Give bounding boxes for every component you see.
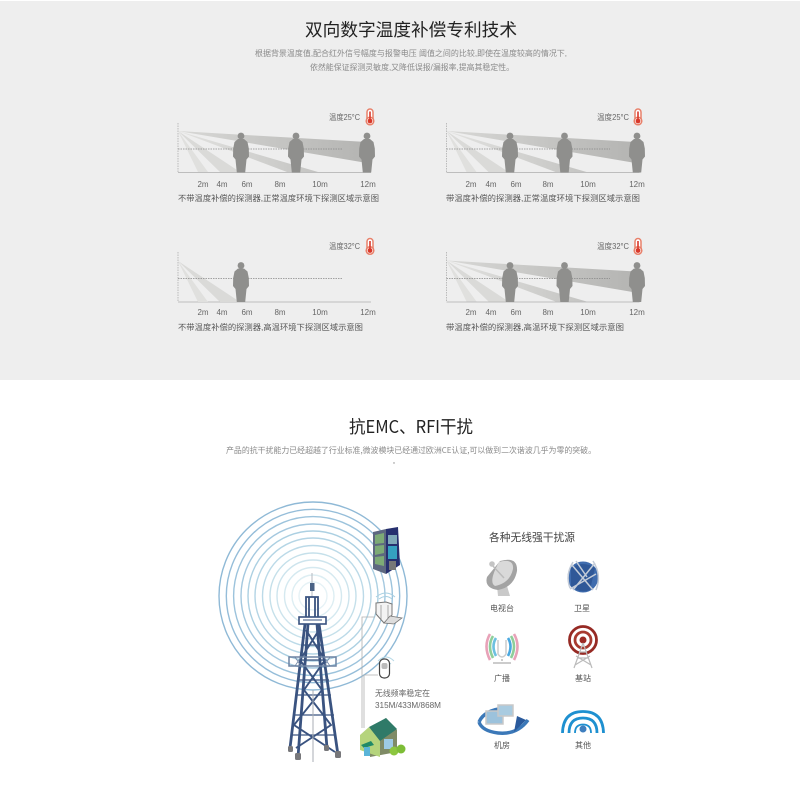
icon: communication tower [288,573,341,762]
chart: with compensation, high temperature: 带温度补偿的探测器,高温环境下探测区域示意图 [446,322,624,332]
chart: with compensation, high temperature: 10m [580,308,596,317]
heading: interference sources: 各种无线强干扰源 [489,529,575,545]
chart: with compensation, normal temperature: 8m [542,180,554,189]
chart: with compensation, normal temperature: 温度25°C [597,112,629,122]
text block: wireless frequency [375,688,441,710]
chart: radio wave rings [219,502,407,690]
chart: with compensation, normal temperature: 2m [465,180,477,189]
chart: without compensation, high temperature: 10m [312,308,328,317]
chart: without compensation, high temperature: 8m [274,308,286,317]
icon: satellite dish [486,560,517,596]
chart: with compensation, normal temperature [446,109,645,203]
label: base station: 基站 [575,673,591,683]
title: temperature compensation: 双向数字温度补偿专利技术 [305,17,517,42]
title: anti-interference: 抗EMC、RFI干扰 [349,414,473,439]
chart: with compensation, normal temperature: 6m [510,180,522,189]
chart: without compensation, normal temperature: 8m [274,180,286,189]
chart: without compensation, high temperature: 不带温度补偿的探测器,高温环境下探测区域示意图 [178,322,363,332]
chart: without compensation, high temperature: 6m [241,308,253,317]
chart: with compensation, high temperature: 12m [629,308,645,317]
chart: with compensation, high temperature: 6m [510,308,522,317]
chart: without compensation, normal temperature: 10m [312,180,328,189]
icon: base station [570,626,596,668]
chart: with compensation, normal temperature: 带温度补偿的探测器,正常温度环境下探测区域示意图 [446,193,640,203]
label: TV station: 电视台 [490,603,514,613]
icon: satellite globe [568,561,598,592]
label: broadcast: 广播 [494,673,510,683]
chart: without compensation, high temperature: 12m [360,308,376,317]
chart: with compensation, normal temperature: 12m [629,180,645,189]
chart: without compensation, normal temperature: 温度25°C [329,112,360,122]
chart: without compensation, normal temperature: 不带温度补偿的探测器,正常温度环境下探测区域示意图 [178,193,379,203]
chart: with compensation, high temperature: 8m [542,308,554,317]
icon: server room [479,705,528,733]
label: satellite: 卫星 [574,604,590,613]
chart: with compensation, high temperature: 4m [485,308,497,317]
chart: without compensation, normal temperature: 2m [197,180,209,189]
icon: sensor [378,657,394,678]
panel: temperature compensation background [0,1,800,380]
chart: without compensation, high temperature [178,238,376,332]
icon: broadcast [486,634,518,663]
chart: without compensation, normal temperature: 12m [360,180,376,189]
text block: temperature description: 依然能保证探测灵敏度,又降低误报/漏报率,提高其稳定性。 [310,62,514,72]
icon: server cabinet [373,527,400,574]
icon: laptop devices [376,593,402,624]
chart: without compensation, normal temperature [178,109,379,203]
text block: anti-interference description: 产品的抗干扰能力已经超越了行业标准,微波模块已经通过欧洲CE认证,可以做到二次谐波几乎为零的突破。 [226,445,596,456]
text block: temperature description: 根据背景温度值,配合红外信号幅度与报警电压 阈值之间的比较,即使在温度较高的情况下, [255,48,567,58]
text block: wireless frequency: 无线频率稳定在 [375,688,430,698]
icon: house [360,718,406,757]
chart: without compensation, normal temperature: 4m [216,180,228,189]
chart: without compensation, normal temperature: 6m [241,180,253,189]
icon: other signals [562,712,604,733]
connector lines [362,617,378,728]
label: other: 其他 [575,740,591,750]
chart: without compensation, high temperature: 4m [216,308,228,317]
chart: with compensation, high temperature: 2m [465,308,477,317]
chart: with compensation, normal temperature: 10m [580,180,596,189]
label: server room: 机房 [494,740,510,750]
chart: with compensation, high temperature: 温度32°C [597,241,629,251]
text block: wireless frequency: 315M/433M/868M [375,701,441,710]
chart: with compensation, high temperature [446,238,645,332]
chart: with compensation, normal temperature: 4m [485,180,497,189]
text block: temperature description [255,48,567,72]
chart: without compensation, high temperature: 温度32°C [329,241,360,251]
chart: without compensation, high temperature: 2m [197,308,209,317]
